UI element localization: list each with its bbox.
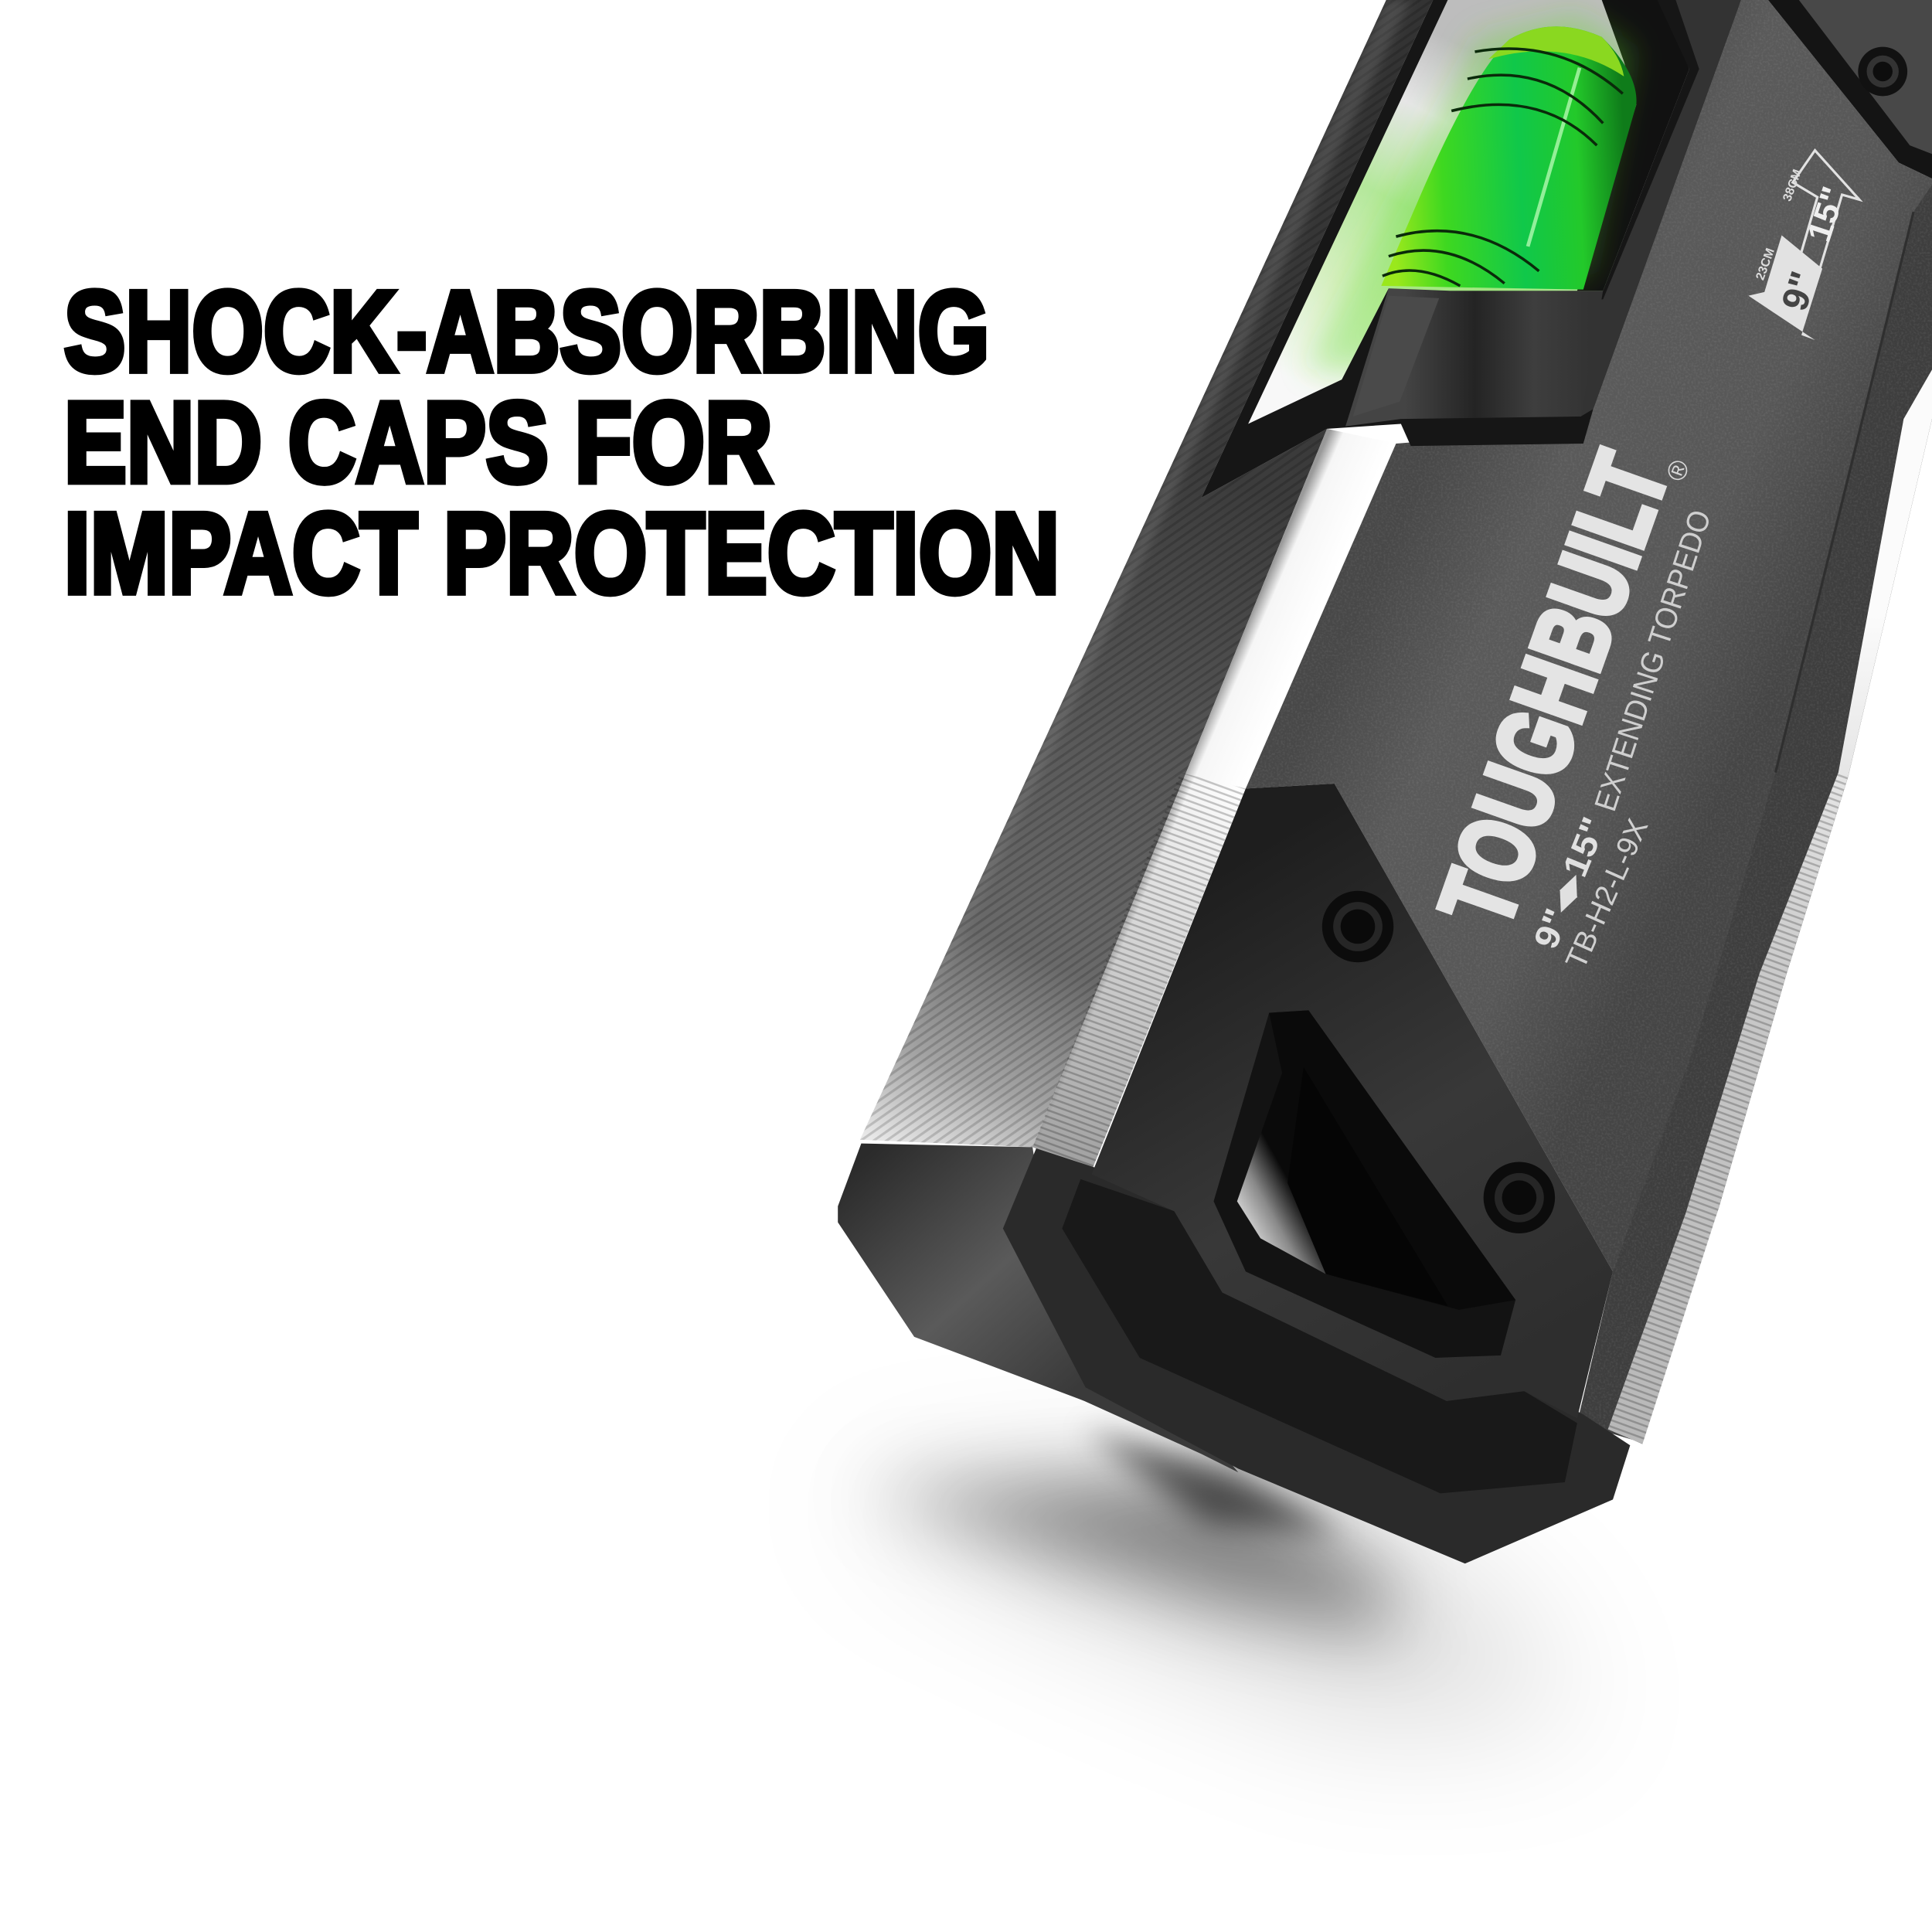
window glass [1248, 0, 1689, 423]
top right end plate with screw [1768, 0, 1932, 179]
screw [1858, 47, 1907, 96]
left brushed metal face [860, 0, 1433, 1147]
length arrow badge: 9" [1774, 267, 1825, 315]
green bubble vial [1381, 26, 1637, 290]
headline line 2: END CAPS FOR [64, 379, 773, 506]
end cap outer bumper [1003, 1148, 1630, 1563]
length arrow badge [1748, 151, 1859, 340]
length arrow badge: 15" [1801, 182, 1853, 247]
length arrow badge: 38CM [1781, 168, 1804, 203]
headline line 3: IMPACT PROTECTION [64, 490, 1060, 617]
level tool [838, 0, 1932, 1563]
front plate screw lower [1484, 1162, 1555, 1233]
front plate screw upper [1322, 891, 1393, 962]
end cap inner step plate [1062, 1179, 1577, 1493]
model number: TB-H2-L-9X [1560, 814, 1655, 974]
registered mark: ® [1661, 456, 1696, 485]
end cap side face [838, 1144, 1238, 1472]
vial marking lines [1383, 49, 1623, 286]
right chrome strip [1608, 369, 1932, 1444]
headline line 1: SHOCK-ABSORBING [64, 268, 989, 396]
TOUGHBUILT logo: TOUGHBUILT [1418, 440, 1691, 940]
vial window frame [1202, 0, 1741, 498]
grey textured main body [1232, 0, 1932, 1454]
length arrow badge: 23CM [1753, 247, 1777, 282]
product description: EXTENDING TORPEDO [1588, 506, 1718, 815]
brand and model printing [1418, 440, 1718, 974]
size text: 9"◂▸15" [1527, 812, 1614, 954]
triangular sight hole [1213, 1010, 1515, 1358]
ground shadow [838, 1429, 1590, 1725]
grey front plate [1092, 784, 1613, 1418]
chrome bevel strip [1032, 429, 1396, 1171]
headline [64, 268, 1060, 617]
